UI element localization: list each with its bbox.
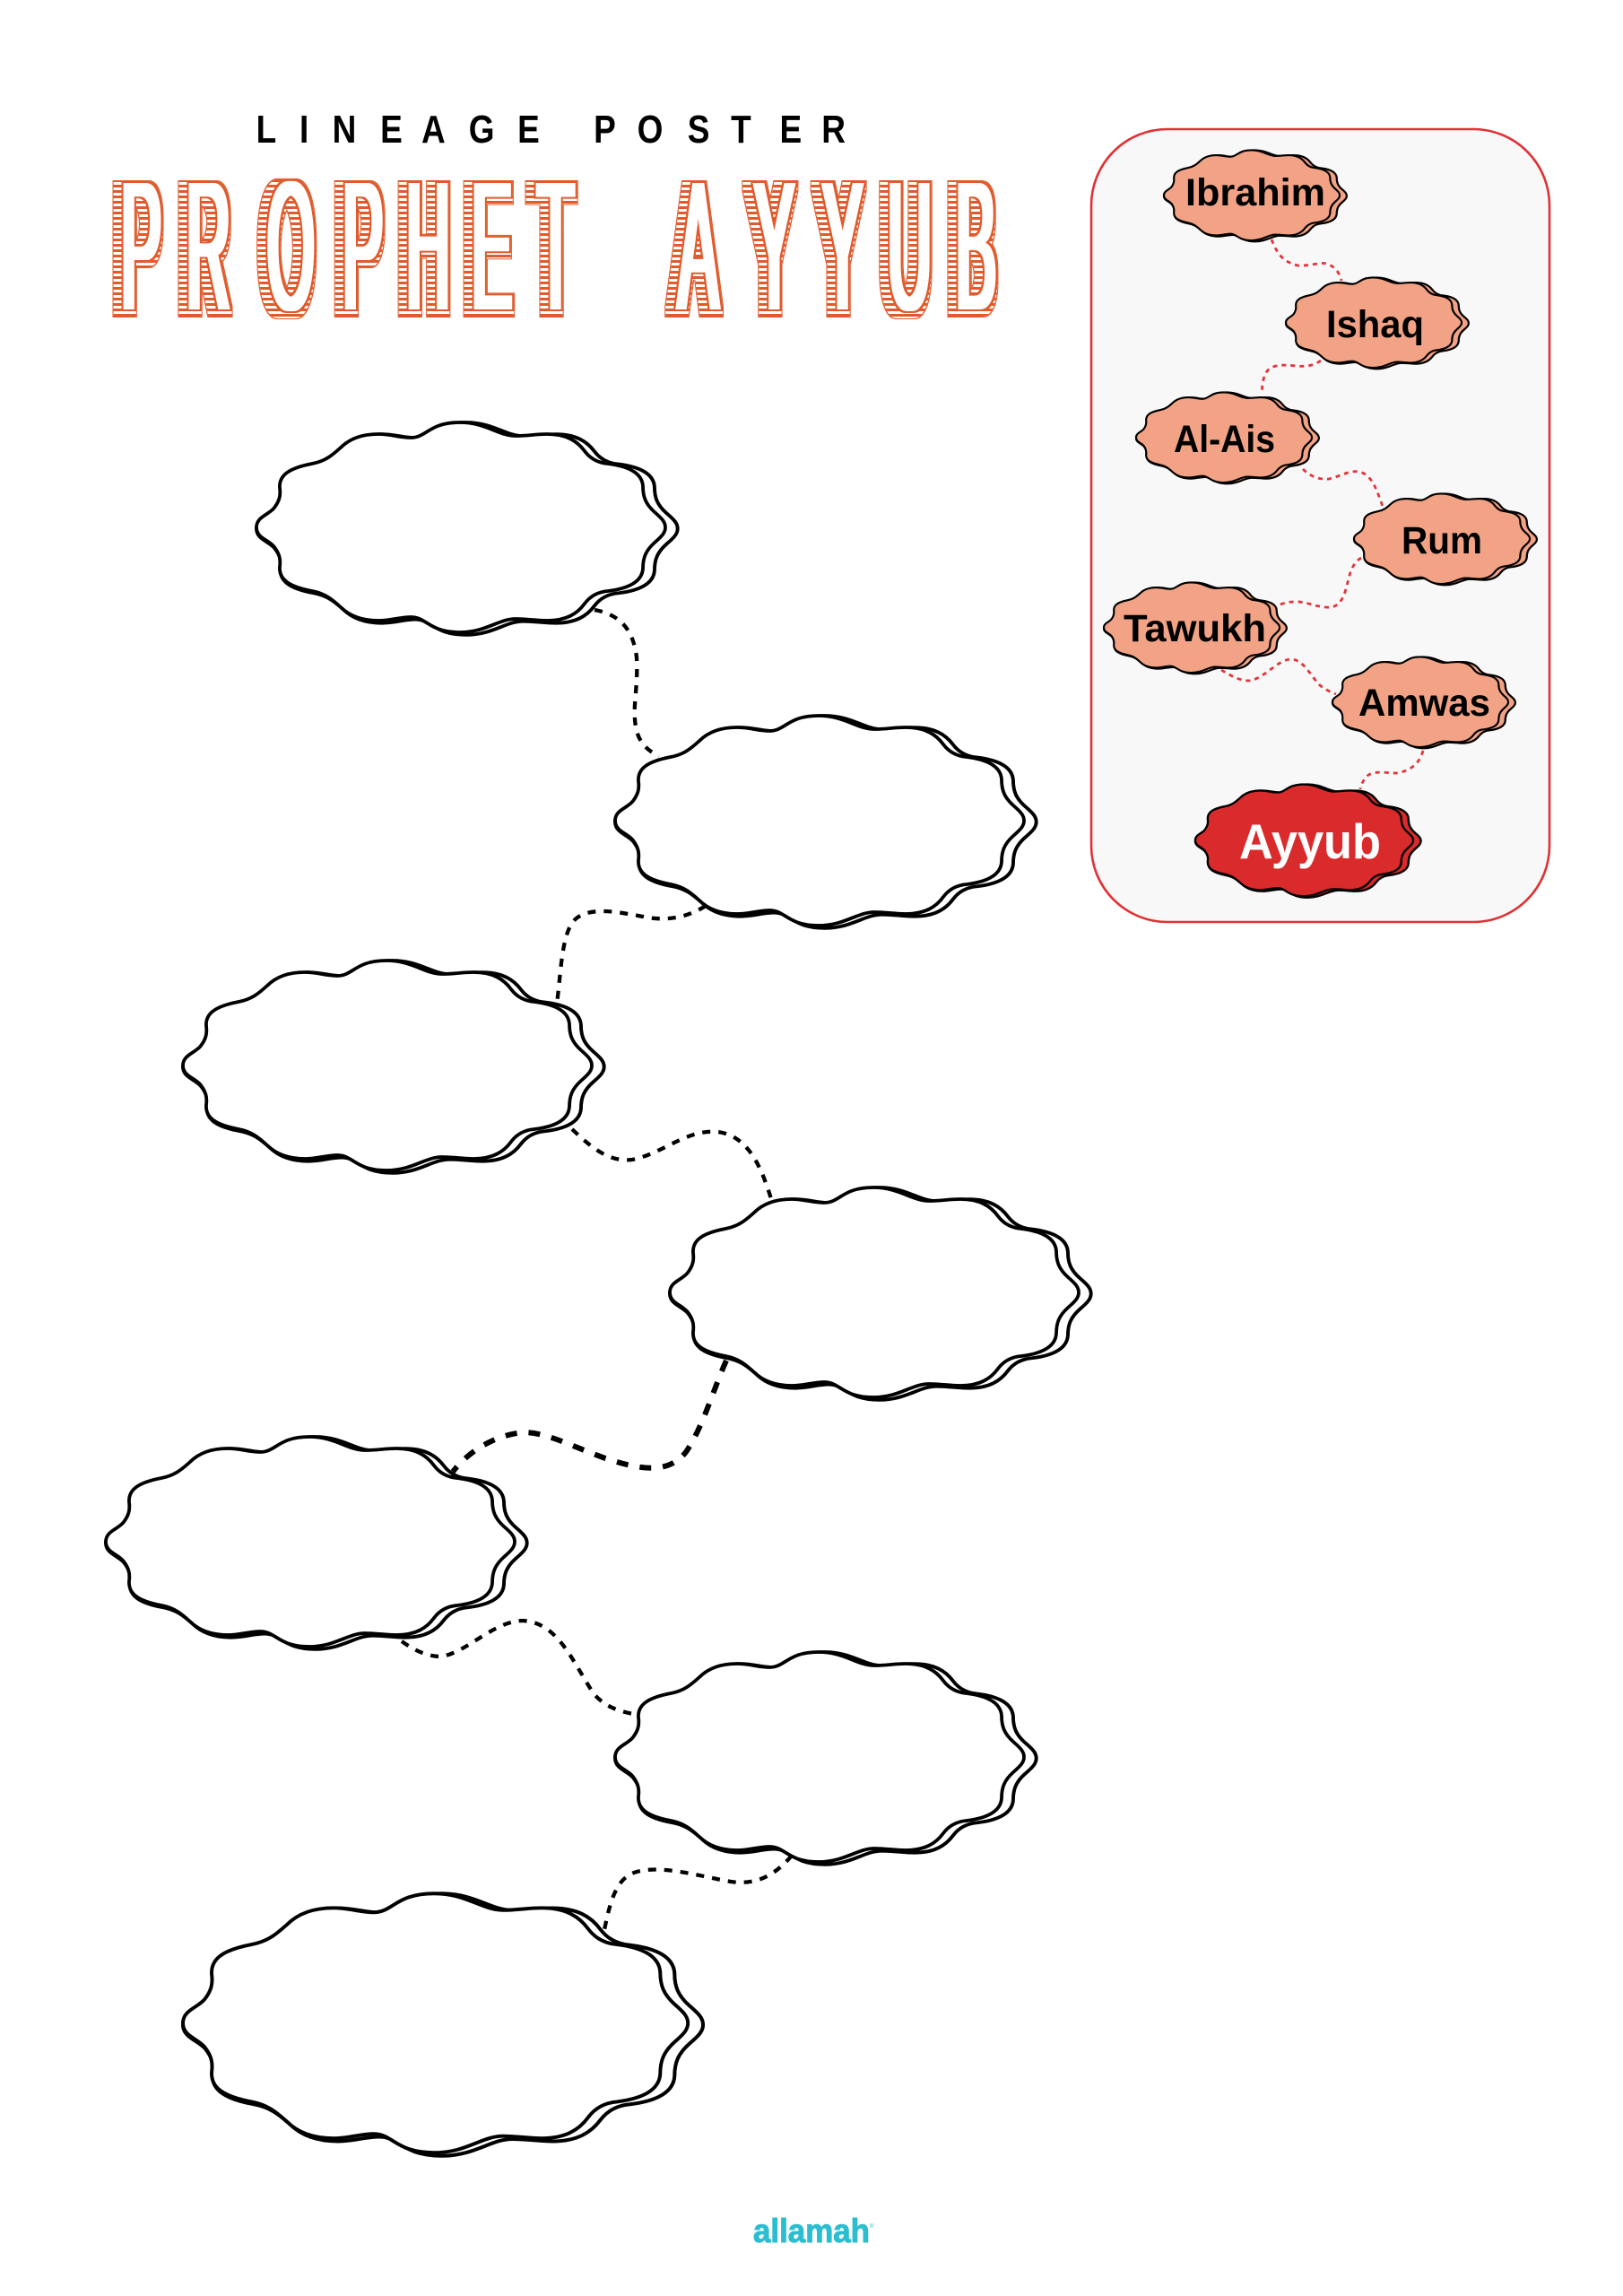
blank cloud 6 <box>615 1652 1037 1865</box>
panel: answer key lineage <box>1091 129 1549 922</box>
node: tawukh <box>1104 582 1287 674</box>
node: rum <box>1354 493 1537 585</box>
node: ibrahim: Ibrahim <box>1185 171 1325 214</box>
node: tawukh: Tawukh <box>1124 607 1266 650</box>
blank cloud 7 <box>183 1893 703 2156</box>
logo: allamah: ® <box>870 2223 874 2230</box>
red connector: rum to tawukh <box>1278 558 1361 607</box>
dashed connector 5 <box>402 1621 638 1715</box>
node: ishaq <box>1286 277 1469 369</box>
heading: lineage poster: LINEAGE POSTER <box>256 107 846 152</box>
node: amwas: Amwas <box>1358 682 1490 725</box>
blank cloud 3 <box>183 961 604 1173</box>
red connector: amwas to ayyub <box>1360 751 1423 789</box>
dashed connector 4 <box>453 1361 726 1472</box>
node: al-ais <box>1136 392 1319 483</box>
node: ayyub: Ayyub <box>1239 813 1381 869</box>
node: ibrahim <box>1164 150 1347 241</box>
red connector: ibrahim to ishaq <box>1271 239 1341 281</box>
node: rum: Rum <box>1402 519 1482 562</box>
red connector: tawukh to amwas <box>1221 659 1336 694</box>
blank cloud 2 <box>615 716 1037 928</box>
blank cloud 1 <box>256 422 678 635</box>
red connector: al-ais to rum <box>1303 469 1384 509</box>
title: prophet ayyub: PROPHET AYYUB <box>121 144 996 349</box>
dashed connector 6 <box>603 1856 792 1939</box>
node: ishaq: Ishaq <box>1326 303 1424 346</box>
logo: allamah: allamah <box>753 2213 870 2249</box>
dashed connector 2 <box>557 906 706 1004</box>
dashed connector 1 <box>595 610 659 756</box>
node: ayyub <box>1195 785 1421 898</box>
blank cloud 5 <box>106 1437 527 1649</box>
blank cloud 4 <box>670 1187 1091 1400</box>
node: al-ais: Al-Ais <box>1174 418 1275 461</box>
dashed connector 3 <box>572 1129 772 1202</box>
red connector: ishaq to al-ais <box>1262 361 1321 393</box>
node: amwas <box>1332 657 1515 748</box>
